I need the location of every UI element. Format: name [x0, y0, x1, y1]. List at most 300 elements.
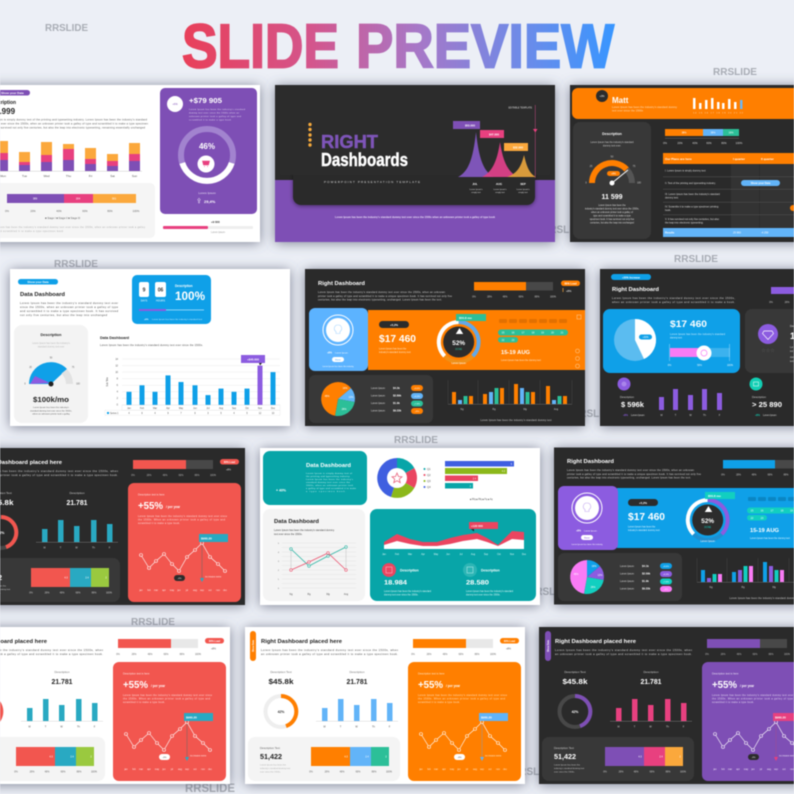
bar chart: Apr	[166, 407, 170, 410]
stacked bar panel: 80%	[372, 770, 377, 774]
calendar	[747, 497, 794, 540]
stacked bar panel: 51,422	[260, 754, 282, 761]
donut chart: Q1	[427, 467, 431, 471]
line chart: $960.20	[186, 716, 197, 720]
progress bar: 80%	[769, 653, 774, 656]
bar chart: Nov	[258, 408, 263, 410]
gauge panel: standard dummy text ever	[38, 346, 65, 348]
paragraph: Lorem Ipsum has been the industry's standard dummy text ever since the 1500s, when an unknown	[318, 291, 446, 294]
weekly bars: F	[109, 546, 111, 550]
watermarks: RRSLIDE	[394, 435, 438, 446]
progress bar: 0%	[705, 653, 710, 656]
paragraph: Lorem Ipsum has been the industry's standard dummy text ever	[20, 301, 118, 305]
line chart panel: Data Dashboard	[274, 519, 319, 525]
grouped bars: Mg	[523, 408, 527, 411]
line chart: $960.20	[481, 716, 492, 720]
gray panel with horizontal stacked bar	[0, 183, 155, 238]
teal intro panel: standard dummy text ever since the	[306, 481, 351, 484]
orange header: 14 15 16 17 18 19 20 21 22	[693, 112, 744, 114]
pie panel: +6,3%	[663, 574, 669, 576]
stacked bar panel: 40%	[340, 770, 345, 774]
peak chart: JUL	[472, 182, 478, 186]
stacked bar panel: 60%	[650, 770, 655, 774]
teal area chart panel: Dec	[522, 553, 527, 556]
stat: 596k: +8%	[623, 414, 629, 417]
red panel: the 1500s. When an unknown printer took a galley of type and	[123, 698, 211, 700]
weekly bars: T	[634, 726, 636, 728]
purple panel: +$79 905	[189, 98, 222, 105]
bar chart: 2	[117, 397, 119, 400]
mini bars	[693, 98, 742, 109]
progress bar: 60%	[164, 653, 169, 656]
grouped bars: Ng	[709, 586, 713, 589]
pie panel: $1.9k	[393, 401, 400, 405]
calendar: 16	[761, 510, 764, 512]
stacked bar panel: 0%	[603, 770, 608, 774]
progress bar	[721, 460, 794, 476]
blue band: +5,2%	[639, 501, 648, 505]
line chart: -3%	[163, 757, 166, 759]
horizontal bars: 2.4	[473, 478, 477, 480]
bar chart: 4	[154, 413, 156, 415]
pie panel: Lorem Ipsum	[371, 394, 385, 398]
line chart: jan	[418, 768, 423, 771]
calendar: 19	[541, 332, 544, 334]
gauge panel: 75	[72, 367, 75, 369]
blue 100% panel: DAYS	[141, 300, 148, 302]
line chart panel: text ever since the 1500s.	[274, 533, 303, 536]
watermarks: RRSLIDE	[713, 67, 757, 78]
stat: 596k: Description	[620, 395, 634, 399]
line chart: jun	[176, 589, 181, 592]
peak chart: simply text	[518, 191, 528, 194]
teal intro panel: Lorem Ipsum is simply dummy text of	[306, 472, 352, 475]
weekly bars: F	[389, 726, 391, 728]
purple panel	[702, 662, 794, 781]
plans table: Show your Data	[751, 181, 771, 185]
plans table: I quarter	[733, 157, 746, 161]
line chart: nov	[201, 768, 206, 771]
calendar: 17	[522, 332, 525, 334]
peak chart: $32.000	[513, 146, 523, 150]
progress bar: 40%	[752, 474, 757, 476]
line chart	[418, 713, 508, 771]
dark side panel: ind	[790, 351, 794, 353]
gray panel with horizontal stacked bar: 0%	[5, 209, 10, 213]
stats: Description	[69, 491, 85, 495]
donut 42%	[560, 696, 590, 727]
bar chart: Aug	[219, 407, 224, 410]
calendar: 22	[502, 339, 505, 342]
bar chart: Mar	[153, 407, 157, 410]
weekly bars: M	[28, 726, 31, 728]
progress bar: 0%	[472, 296, 477, 298]
calendar: 15	[751, 510, 754, 512]
small stacked bar: 100%	[736, 141, 743, 145]
stat: 18.984	[382, 563, 432, 596]
line chart: sep	[774, 768, 779, 771]
donut 42%: 42%	[278, 710, 284, 714]
orange header: Matt	[612, 96, 629, 105]
line chart: mar	[139, 768, 143, 771]
stat: 25 890: Description	[752, 395, 766, 399]
blue bulb card: Done	[335, 360, 342, 362]
line chart panel: Mg	[326, 593, 330, 596]
stat: 25 890: Lorem Ipsum	[763, 414, 776, 417]
calendar: 15	[502, 332, 505, 334]
stacked bar panel: 0%	[29, 592, 34, 594]
heading: RIGHT	[321, 132, 378, 152]
line chart: sep	[200, 589, 205, 592]
progress bar: 40%	[503, 296, 508, 298]
donut 52%: 52%	[452, 340, 465, 347]
blue bulb card: Lorem Ipsum has been the industry	[322, 365, 354, 368]
plans table: Results	[665, 230, 675, 234]
grouped bars: Ang	[554, 408, 559, 411]
stat: 18.984: Lorem Ipsum has been the industry's standard	[384, 590, 432, 593]
stacked bar panel	[0, 558, 120, 602]
donut 52%: $50.8 mo	[459, 316, 472, 320]
grouped bars: Mg	[772, 586, 776, 589]
bar chart: Jun	[193, 408, 198, 410]
watermarks: RRSLIDE	[674, 254, 718, 265]
progress bar: +8%	[506, 648, 512, 650]
slide 1: white stacked bars and purple donut panel	[0, 85, 260, 242]
weekly bars: M	[617, 726, 620, 728]
slide 5: dark dashboard with orange band	[305, 269, 585, 426]
gauge panel: 50	[611, 156, 614, 158]
orange panel: the 1500s. When an unknown printer took a galley of type and	[418, 698, 506, 700]
line chart: jun	[750, 768, 755, 771]
tag pill	[0, 90, 30, 96]
pie panel: Lorem Ipsum	[620, 565, 634, 568]
progress bar: 0%	[131, 474, 136, 477]
orange band: +5,2%	[390, 323, 399, 327]
line chart: jul	[759, 768, 763, 771]
paragraph	[261, 648, 399, 656]
stacked bar panel: 2.4	[70, 756, 74, 758]
line chart: oct	[208, 589, 212, 592]
donut 52%: Lorem Ipsum	[451, 362, 466, 365]
calendar: 17	[771, 510, 774, 512]
pie panel: 45%	[574, 573, 579, 576]
blue panel: 0%	[668, 364, 672, 367]
orange header: +3%	[600, 95, 605, 98]
bar chart: 9	[167, 413, 169, 415]
gauge panel: 100	[76, 384, 81, 386]
weekly bars	[316, 699, 398, 728]
paragraph: Lorem Ipsum has been the industry's standard dummy text ever since the 1500s,	[612, 296, 735, 300]
plans table: -4 250	[761, 230, 769, 234]
gauge panel: 0	[585, 182, 587, 184]
paragraph: Lorem Ipsum has been the industry's standard dummy text ever since the 1500s, when an unknown	[567, 469, 695, 472]
progress bar: Lorem Ipsum	[211, 231, 225, 234]
gauge panel: Lorem Ipsum has the industry's standard	[590, 141, 634, 144]
line chart: aug	[178, 768, 183, 771]
dark side panel: text	[790, 360, 794, 363]
gauge panel: 25	[590, 165, 593, 168]
blue bulb card	[309, 308, 368, 371]
stat: 28.580	[463, 563, 514, 596]
calendar: 23	[512, 339, 515, 342]
bar chart: 4	[117, 390, 119, 394]
peak chart: Lorem Ipsum's	[469, 189, 483, 191]
line chart: jun	[456, 768, 461, 771]
teal area chart panel: Jan	[382, 553, 387, 556]
watermarks: RRSLIDE	[512, 766, 556, 778]
small stacked bar: 0%	[663, 141, 668, 145]
donut 52%	[439, 314, 486, 365]
horizontal bars: 5	[511, 464, 513, 466]
progress bar: 80% Load	[224, 461, 236, 464]
stacked bar chart: Sat	[110, 174, 115, 178]
stacked bar panel: 80%	[92, 592, 97, 594]
stacked bar panel: 100%	[106, 592, 113, 594]
line chart: feb	[427, 768, 431, 771]
teal intro panel: a galley of type and scrambled it to make	[306, 487, 357, 490]
trophy icons	[308, 123, 312, 147]
paragraph: Lorem Ipsum has been the industry's standard dummy text ever since the 1500s, when	[261, 648, 399, 652]
bar chart: Sep	[232, 408, 237, 410]
callout: +$45.000	[247, 357, 259, 361]
peak chart: simply text	[495, 191, 505, 194]
orange header: Lorem Ipsum has been the industry's standard dummy	[612, 106, 678, 109]
gauge panel: centuries, but also the leap into unchanged	[590, 222, 635, 224]
progress bar: +8%	[211, 648, 217, 650]
red panel: the 1500s. When an unknown printer took a galley of type and	[138, 518, 226, 522]
pie panel: 16%	[343, 387, 348, 390]
small stacked bar	[663, 129, 743, 145]
paragraph	[0, 648, 104, 656]
stacked bar panel: 2	[90, 756, 92, 758]
gauge panel: +8%	[611, 173, 617, 176]
progress bar: 40%	[443, 653, 448, 656]
line chart: aug	[193, 589, 198, 592]
watermarks: RRSLIDE	[45, 23, 88, 34]
pie panel: +9%	[664, 589, 668, 591]
purple panel: dummy text ever since the 1500s when an	[189, 112, 240, 114]
donut 52%: $50.8 mo	[708, 494, 721, 498]
purple panel: scrambled it to make a type book.	[712, 701, 754, 704]
progress bar: 40%	[737, 653, 742, 656]
line chart: nov	[216, 589, 221, 592]
orange header	[572, 88, 794, 119]
bar chart: 6	[194, 413, 196, 415]
bar chart: 4	[233, 413, 235, 415]
gauge panel: 50	[50, 358, 53, 360]
weekly bars: Th	[372, 726, 376, 728]
donut 42%	[0, 517, 16, 548]
bar chart: Feb	[140, 408, 145, 410]
calendar: 18	[781, 510, 784, 512]
purple panel: +55%	[712, 680, 737, 691]
teal area chart panel: Jun	[446, 553, 451, 556]
stacked bar panel: 40%	[45, 770, 50, 774]
red panel: +55%	[138, 501, 163, 512]
teal intro panel: Lorem Ipsum has been the industry's	[306, 478, 354, 481]
stats: Description	[643, 670, 659, 674]
bar chart: 12	[259, 413, 262, 415]
purple bulb card: Done	[584, 538, 591, 540]
stat: 18.984: dummy text ever since the 1500s.	[384, 594, 419, 596]
calendar: 21	[561, 332, 564, 334]
bar chart: 3	[207, 413, 209, 415]
progress bar	[131, 459, 239, 477]
red panel: Lorem Ipsum has been the industry's standard dummy text ever since	[138, 515, 228, 518]
stats: $45.8k	[268, 679, 294, 686]
line chart: INCREASE HERE	[190, 754, 207, 758]
gauge panel: Lorem Ipsum has been the	[598, 204, 626, 207]
pie panel: +7,8%	[663, 581, 669, 583]
heading: Right Dashboard	[612, 287, 659, 293]
stacked bar panel: 51,422	[554, 754, 576, 761]
bar chart: 10	[272, 413, 275, 415]
bar chart: 10	[115, 371, 119, 374]
weekly bars: F	[683, 726, 685, 728]
weekly bars: M	[323, 726, 326, 728]
bar chart: May	[179, 408, 184, 410]
blue 100% panel: 9	[143, 288, 146, 294]
donut chart: Q3	[427, 479, 431, 483]
bar chart: Data Dashboard	[100, 336, 130, 340]
donut 52%: DONE	[455, 348, 463, 351]
stacked bar chart: Tue	[22, 174, 27, 178]
callout	[241, 355, 265, 366]
gray panel with horizontal stacked bar: 60%	[82, 209, 88, 213]
gauge panel	[14, 325, 88, 423]
stats: 21.781	[346, 679, 368, 686]
line chart: may	[155, 768, 160, 771]
line chart panel: 0	[278, 588, 280, 590]
subtitle: POWERPOINT PRESENTATION TEMPLATE	[324, 180, 420, 184]
orange panel: Description text is here	[418, 672, 445, 676]
line chart: -3%	[458, 757, 461, 759]
watermarks: RRSLIDE	[542, 224, 586, 236]
title	[182, 12, 614, 82]
gauge panel: 25	[29, 367, 32, 369]
stat: 28.580: dummy text ever since the 1500s.	[466, 594, 501, 596]
progress bar: 60%	[753, 653, 758, 656]
slide 8: white teal data dashboard	[260, 448, 540, 605]
weekly bars: Th	[77, 726, 81, 728]
line chart: nov	[790, 768, 794, 771]
blue band: industry's standard dummy text	[628, 529, 660, 532]
bar chart: Jul	[207, 408, 210, 410]
pie panel: +7,8%	[414, 403, 420, 405]
line chart panel: Ng	[289, 593, 293, 596]
pie panel: 13%	[598, 574, 603, 577]
line chart: $960.20	[201, 536, 212, 540]
red panel: scrambled it to make a type book.	[138, 522, 180, 525]
bar chart: 5	[246, 413, 248, 415]
pie panel: Lorem Ipsum	[371, 387, 385, 390]
red panel: / per year	[166, 505, 181, 509]
purple panel: +6%	[172, 102, 178, 106]
stats: 21.781	[52, 679, 73, 686]
red panel	[113, 662, 226, 781]
stacked bar panel	[0, 737, 105, 781]
line chart: may	[170, 589, 175, 592]
stacked bar panel: 2.4	[659, 756, 663, 758]
purple panel: unknown printer took a galley of type and	[189, 115, 242, 118]
donut 42%	[0, 696, 2, 727]
stat: 28.580: Description	[481, 568, 500, 572]
horizontal bars: ■ Rfq ■ Rfq ■ Fq ■ Aq	[470, 498, 493, 501]
progress bar	[769, 287, 794, 304]
weekly bars: M	[660, 414, 663, 417]
teal intro panel: Data Dashboard	[306, 463, 351, 469]
blue band: Lorem Ipsum has been the	[628, 526, 656, 528]
blue bulb card: +8%	[327, 352, 333, 354]
small stacked bar: 80%	[721, 141, 727, 145]
horizontal bars: 4.3	[502, 471, 506, 473]
red panel: / per year	[151, 684, 166, 688]
pie panel: Lorem Ipsum	[620, 588, 634, 590]
weekly bars	[659, 389, 722, 417]
title: SLIDE	[182, 12, 339, 82]
blue 100% panel: 06	[158, 288, 163, 294]
purple bulb card: Lorem Ipsum	[584, 530, 597, 532]
gray panel with horizontal stacked bar: Ipsum has been the industry's standard dummy text ever since the 1500s, when an unknown printer took a galley	[0, 226, 146, 229]
blue panel	[603, 309, 740, 373]
weekly bars	[36, 520, 118, 550]
weekly bars: W	[60, 726, 63, 728]
progress bar	[411, 638, 519, 656]
donut 52%: DONE	[704, 526, 712, 529]
bar chart: 5	[220, 413, 222, 415]
peak chart: AUG	[496, 182, 502, 186]
weekly bars: F	[94, 726, 96, 728]
pie panel: $1.9k	[642, 579, 649, 583]
stacked bar panel: Description Text	[260, 746, 280, 750]
tag pill: Show your Data	[27, 280, 49, 284]
plans table: V. It has survived not only five centuries, but also	[665, 218, 720, 221]
pie panel: 16%	[592, 565, 597, 568]
teal area chart panel: +120 000	[471, 524, 483, 528]
donut chart	[377, 458, 431, 498]
pie panel: $9.33k	[393, 408, 402, 412]
orange panel: Lorem Ipsum has been the industry's standard dummy text ever since	[418, 694, 508, 697]
line chart: mar	[434, 768, 438, 771]
gauge panel: industry's standard dummy text ever since the 1500s,	[585, 208, 639, 210]
progress bar: 80%	[475, 653, 480, 656]
stats	[0, 491, 88, 507]
stacked bar panel: 20%	[325, 770, 330, 774]
stacked bar panel: Lorem Ipsum has been the	[260, 764, 287, 766]
gauge panel	[573, 122, 651, 239]
red panel: Description text is here	[123, 672, 150, 676]
bar chart: 7	[180, 413, 182, 415]
progress bar: 60%	[459, 653, 464, 656]
pie panel: $9.33k	[642, 586, 651, 590]
line chart panel: Rg	[307, 593, 311, 596]
purple bulb card	[558, 486, 618, 550]
stats: $45.8k	[562, 679, 588, 686]
heading: Data Dashboard	[20, 292, 65, 298]
line chart: jan	[138, 589, 143, 592]
stacked bar panel: 2.4	[85, 576, 89, 580]
stats	[562, 670, 662, 686]
gauge panel: standard dummy text ever since the 1500s,	[30, 409, 72, 412]
paragraph	[318, 291, 453, 302]
grouped bars	[697, 558, 794, 600]
gauge panel: 100	[637, 182, 642, 184]
pie panel: Lorem Ipsum	[620, 580, 634, 583]
blue bulb card: Lorem Ipsum	[335, 352, 348, 354]
weekly bars: T	[45, 726, 47, 728]
plans table: 25 960	[733, 230, 741, 234]
pie panel	[558, 553, 682, 601]
